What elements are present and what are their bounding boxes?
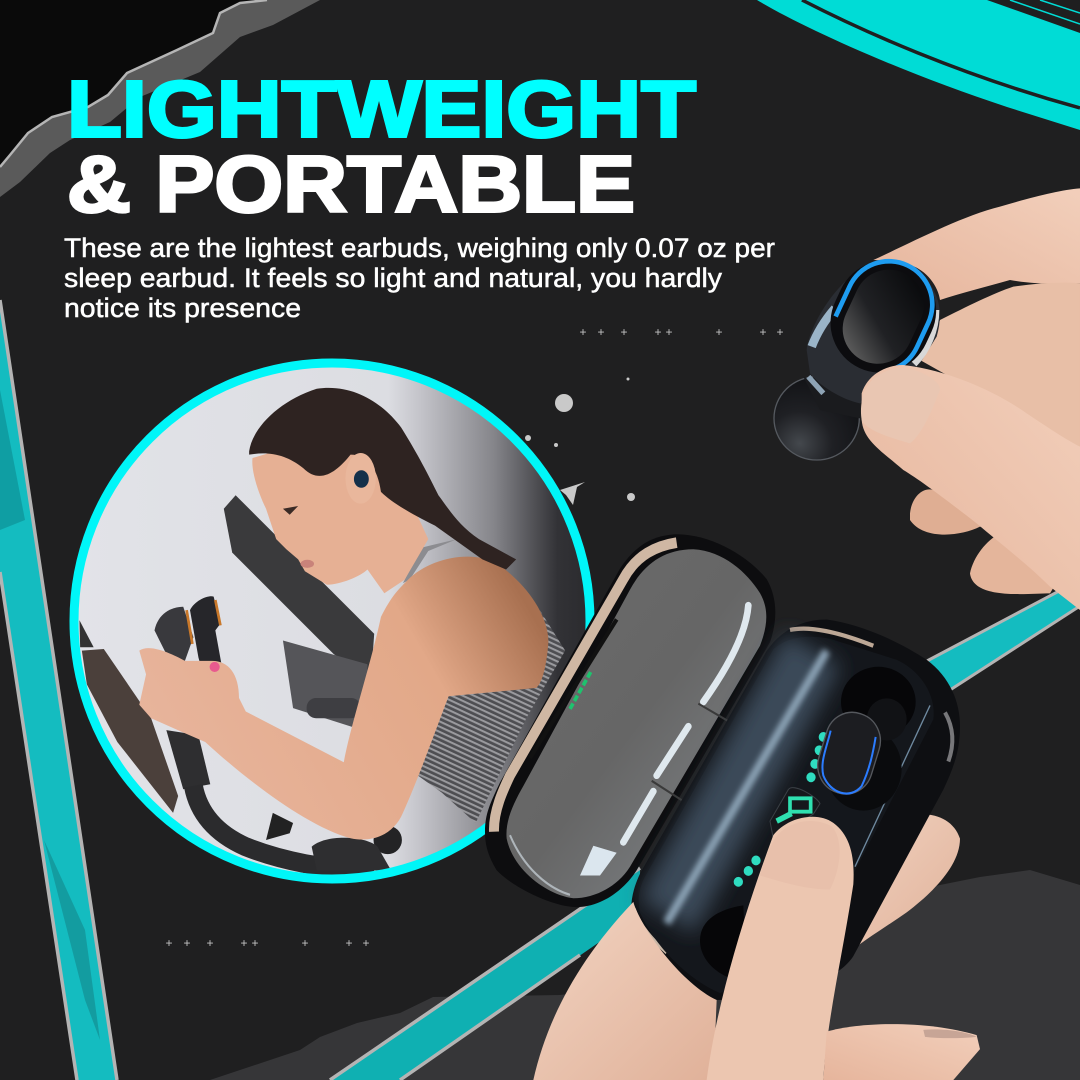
- neck and face: [252, 441, 428, 593]
- second finger: [920, 283, 1080, 450]
- photo: woman on exercise machine: [70, 360, 600, 890]
- lips: [301, 560, 314, 568]
- earbud in ear: [354, 470, 369, 488]
- title: [67, 64, 696, 228]
- title line 2: & PORTABLE: [67, 140, 635, 228]
- index finger: [861, 365, 1080, 610]
- handles: [154, 596, 402, 870]
- teal brush stroke: top right: [757, 0, 1080, 130]
- hair and braid: [249, 388, 516, 570]
- battery dots: [734, 732, 828, 887]
- torn paper: top left: [0, 0, 320, 197]
- left palm: [533, 902, 717, 1080]
- teal strip: bottom diagonal: [330, 868, 640, 1080]
- console: [79, 620, 178, 813]
- teal strip: right: [925, 580, 1080, 690]
- case button: [770, 788, 820, 839]
- teal strip: left: [0, 300, 117, 1080]
- lower right finger: [823, 1024, 980, 1080]
- eye: [283, 506, 298, 515]
- fourth finger: [970, 533, 1060, 594]
- pink nail: [210, 662, 220, 672]
- case lid: [485, 534, 775, 907]
- description text: [64, 233, 775, 323]
- pressing finger: [707, 817, 854, 1080]
- title line 1: LIGHTWEIGHT: [67, 64, 696, 154]
- plus signs bottom: ++++++++: [166, 936, 370, 950]
- description text: These are the lightest earbuds, weighing only 0.07 oz per: [64, 233, 775, 263]
- charging case and hand: [485, 534, 980, 1080]
- striped sports top: [418, 610, 565, 823]
- ear: [354, 453, 376, 472]
- torn paper: bottom: [210, 870, 1080, 1080]
- photo ring: [74, 363, 590, 879]
- description text: notice its presence: [64, 293, 301, 323]
- third finger: [910, 489, 993, 535]
- earbud in case: [811, 705, 887, 801]
- arm and back: [139, 557, 548, 840]
- decorative splatter: [525, 378, 635, 505]
- top finger: [873, 188, 1080, 300]
- thumb behind case: [830, 814, 960, 954]
- description text: sleep earbud. It feels so light and natural, you hardly: [64, 263, 723, 293]
- plus signs top: ++++++++: [580, 325, 784, 339]
- case body: [631, 619, 960, 1000]
- earbud: [774, 244, 953, 460]
- top strap: [403, 539, 457, 583]
- floating earbud and fingers: [774, 188, 1080, 610]
- back machine: [224, 495, 374, 732]
